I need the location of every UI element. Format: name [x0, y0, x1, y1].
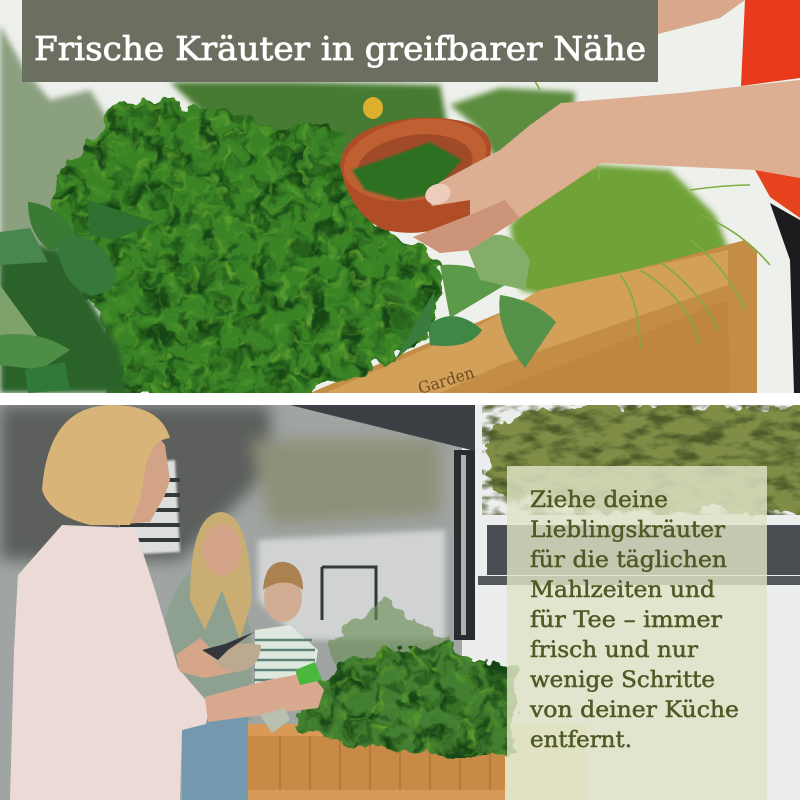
chives back [450, 88, 575, 170]
body text: für Tee – immer [530, 608, 723, 633]
dark trousers [770, 203, 800, 393]
yellow pepper [363, 97, 383, 119]
bowl and scissors [202, 632, 261, 672]
woman shirt [10, 525, 210, 800]
panel: top photo of herbs [0, 0, 800, 400]
girl [165, 512, 252, 800]
bamboo [485, 405, 800, 515]
interior light wall [258, 530, 445, 640]
dark ledge [487, 525, 800, 575]
body text: wenige Schritte [530, 668, 715, 693]
dark herbs behind [170, 82, 450, 160]
parsley base [55, 100, 445, 400]
boy face [264, 574, 302, 622]
title: Frische Kräuter in greifbarer Nähe [34, 29, 646, 68]
parsley shadows [55, 100, 445, 400]
lavender plant [0, 25, 107, 292]
body text: für die täglichen [530, 548, 727, 573]
girl hair [190, 512, 252, 640]
body text: Mahlzeiten und [530, 578, 715, 603]
woman hand with bowl [176, 638, 235, 678]
broad green leaves by planter [395, 235, 556, 368]
roller blind [290, 405, 475, 451]
photo background wall [0, 0, 800, 393]
boy shirt [255, 625, 318, 700]
house wall [462, 405, 800, 800]
girl jeans [182, 715, 248, 800]
reflection of house slats [120, 460, 180, 555]
panel: bottom photo of family at planter [0, 405, 800, 800]
wooden planter [310, 240, 757, 398]
girl face [203, 524, 241, 576]
boy hair [263, 562, 303, 590]
upper forearm [658, 0, 745, 34]
title banner [22, 0, 658, 82]
terracotta bowl [340, 118, 491, 233]
boy [254, 562, 318, 700]
woman hair [42, 405, 170, 525]
red shirt top [741, 0, 800, 86]
body text: Ziehe deine [530, 488, 668, 513]
window reflection dark upper left [0, 405, 270, 560]
planter herbs [295, 645, 515, 755]
body text: Lieblingskräuter [530, 518, 726, 543]
planter box [248, 724, 587, 800]
thumbnail [425, 184, 451, 204]
body text: von deiner Küche [529, 698, 739, 723]
window reflection trees [250, 440, 440, 525]
parsley highlights [55, 100, 445, 400]
red shirt lower [755, 170, 800, 218]
text panel [507, 466, 767, 800]
chive blades [525, 78, 770, 350]
planter label: Garden [416, 363, 477, 398]
bamboo shadows [482, 405, 800, 515]
woman arm holding bottle [205, 672, 324, 722]
tall rosemary behind [330, 600, 450, 690]
woman face [125, 434, 170, 524]
window frame [454, 450, 475, 640]
large leaves left [0, 200, 155, 393]
arm and hand [413, 80, 800, 253]
chives plant [510, 165, 735, 300]
foliage left dark [0, 240, 125, 393]
body text [529, 488, 739, 753]
body text: frisch und nur [530, 638, 698, 663]
herb mass [55, 100, 445, 400]
glass window [0, 405, 462, 800]
body text: entfernt. [530, 728, 632, 753]
herbs in bowl [352, 142, 462, 200]
reflected table frame [322, 567, 376, 620]
green spray bottle [260, 662, 322, 733]
